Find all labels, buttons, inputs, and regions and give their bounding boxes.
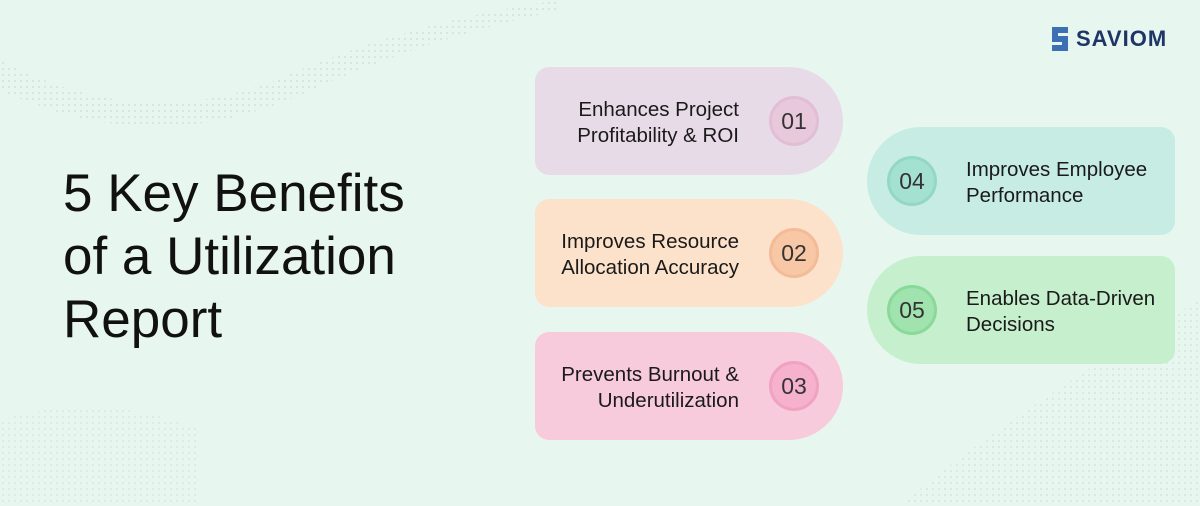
card 03: Prevents Burnout & xyxy=(561,363,739,386)
card 05 xyxy=(867,256,1175,364)
card 03: Underutilization xyxy=(598,389,739,412)
card 02: Allocation Accuracy xyxy=(561,256,739,279)
card 04: 04 xyxy=(899,168,925,194)
card 05: Enables Data-Driven xyxy=(966,287,1155,310)
title: Report xyxy=(63,290,222,349)
logo: SAVIOM xyxy=(1076,26,1167,51)
card 04 xyxy=(867,127,1175,235)
card 01: Enhances Project xyxy=(578,98,739,121)
title xyxy=(63,164,405,349)
card 03: 03 xyxy=(781,372,807,398)
card 03 xyxy=(535,332,843,440)
card 04: Improves Employee xyxy=(966,158,1147,181)
card 05: 05 xyxy=(899,296,925,322)
card 02: 02 xyxy=(781,240,807,266)
card 02: Improves Resource xyxy=(561,230,739,253)
card 01: Profitability & ROI xyxy=(577,124,739,147)
title: 5 Key Benefits xyxy=(63,164,405,223)
card 04: Performance xyxy=(966,184,1083,207)
title: of a Utilization xyxy=(63,227,396,286)
card 01 xyxy=(535,67,843,175)
card 01: 01 xyxy=(781,108,807,134)
card 05: Decisions xyxy=(966,313,1055,336)
card 02 xyxy=(535,199,843,307)
